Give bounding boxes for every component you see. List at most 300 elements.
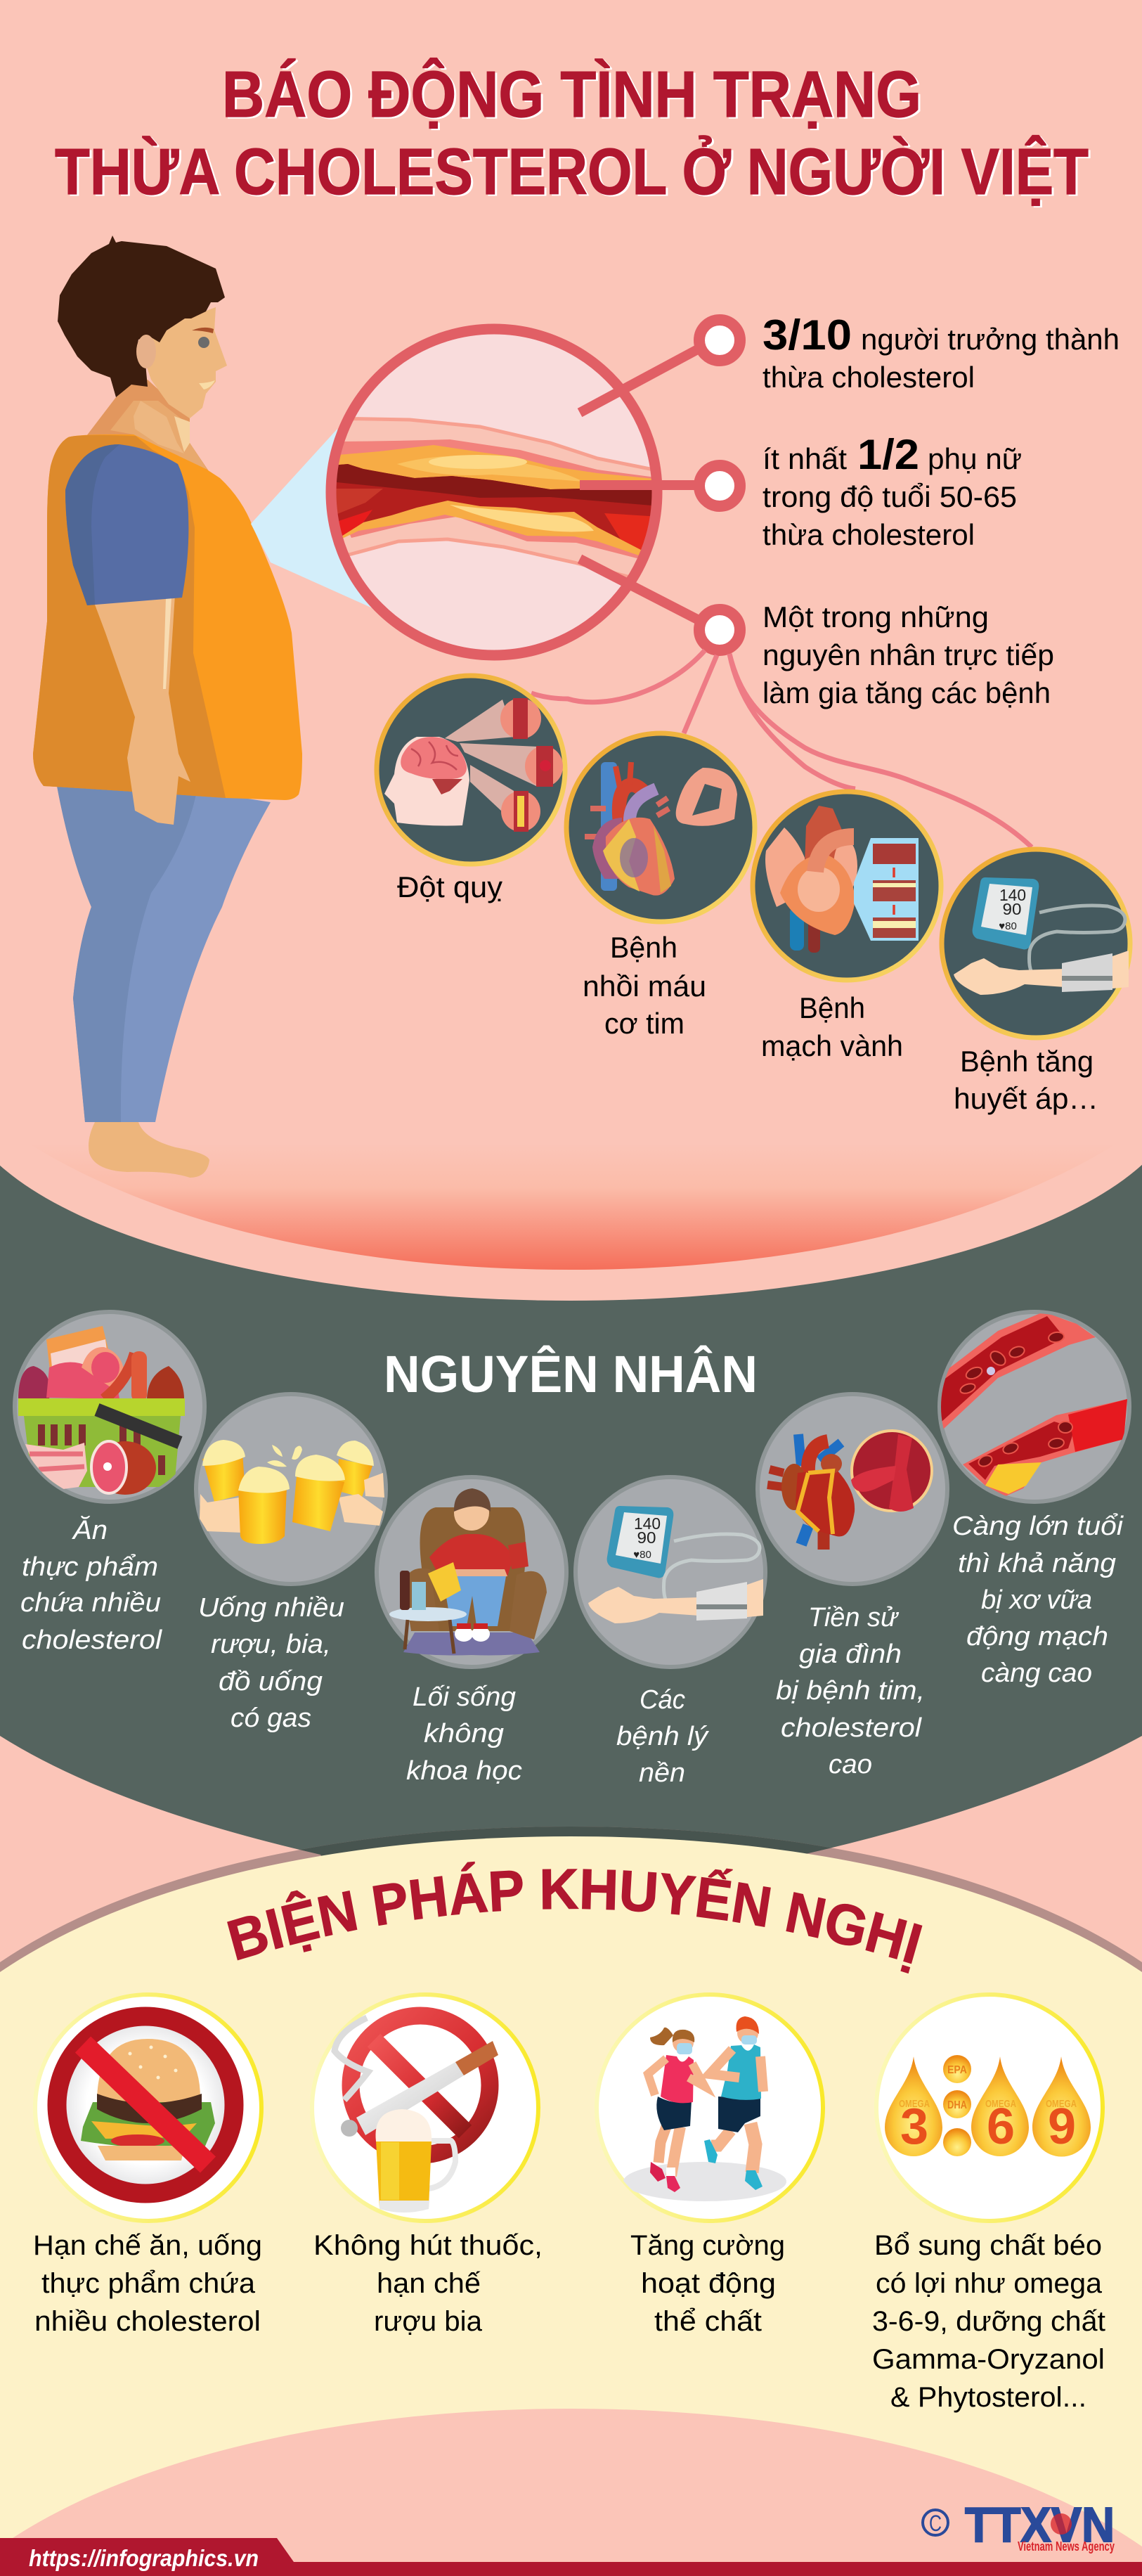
caption cause 6: [952, 1512, 1124, 1688]
caption recommendation 1: thực phẩm chứa: [41, 2268, 256, 2299]
section: [852, 1431, 932, 1511]
heart: [606, 818, 675, 896]
caption recommendation 3: thể chất: [654, 2306, 762, 2337]
stat text 2: 1/2: [857, 431, 919, 478]
caption recommendation 2: [313, 2230, 543, 2337]
caption recommendation 1: Hạn chế ăn, uống: [33, 2230, 262, 2261]
connectors to diseases: [531, 650, 1032, 847]
heart purple side: [592, 818, 622, 879]
caption cause 4: nền: [639, 1758, 685, 1788]
artery magnifier circle: [330, 329, 661, 655]
plaque: [985, 1462, 1042, 1494]
upper cells: [959, 1331, 1065, 1395]
lower vessel lumen: [968, 1422, 1072, 1480]
cone bottom: [470, 765, 523, 831]
heart light: [798, 867, 840, 912]
caption cause 5: bị bệnh tim,: [776, 1676, 925, 1706]
lower cells: [977, 1422, 1072, 1469]
globe: [1051, 2513, 1072, 2535]
head silhouette: [384, 737, 469, 825]
infarct: [620, 838, 648, 877]
drop labels: EPA: [947, 2064, 967, 2076]
cause 2: beers: [196, 1394, 386, 1584]
heading: recommendations arc path: [201, 1909, 948, 1970]
arm: [95, 595, 190, 825]
caption recommendation 4: Gamma-Oryzanol: [872, 2344, 1105, 2375]
caption cause 2: đồ uống: [219, 1667, 323, 1696]
table legs: [405, 1620, 454, 1654]
floor glow under the figure: [28, 1143, 1117, 1270]
arm end: [747, 1579, 763, 1617]
shirt: [429, 1534, 514, 1576]
top background block: [0, 0, 1142, 1097]
icon: stroke: [377, 676, 565, 864]
caption cause 4: [616, 1685, 709, 1788]
drop labels: 3: [900, 2099, 928, 2155]
pulmonary artery: [815, 837, 854, 872]
tube: [663, 1534, 760, 1609]
foam back right: [337, 1441, 374, 1466]
belly: [439, 1569, 507, 1579]
arm highlight: [163, 598, 171, 689]
cream panel shadow on dark: [0, 1736, 1142, 1898]
lower vessel outer: [963, 1399, 1127, 1496]
hair: [454, 1488, 491, 1512]
lumen: [336, 464, 651, 550]
heading: causes: NGUYÊN NHÂN: [384, 1345, 758, 1403]
vessel top: [500, 698, 541, 739]
shirt shadow side: [33, 435, 226, 798]
slice lumen: [692, 784, 722, 816]
neck back: [86, 380, 209, 471]
foot: [89, 1122, 209, 1178]
cause 1: meat basket: [15, 1312, 205, 1502]
connector lines: [580, 347, 703, 622]
upper vessel lumen: [938, 1316, 1065, 1422]
stat text 2: ít nhất: [763, 442, 847, 475]
stat text 3: [763, 600, 1054, 709]
jeans: [443, 1576, 506, 1626]
woman back leg: [658, 2127, 666, 2163]
face: [145, 307, 227, 418]
bacon stripes: [30, 1454, 84, 1469]
woman shorts: [656, 2097, 692, 2130]
patty: [97, 2094, 202, 2123]
man back leg: [711, 2130, 731, 2146]
foam back left: [202, 1440, 245, 1466]
plaque stage 1: [873, 844, 916, 864]
caption cause 2: [198, 1593, 344, 1733]
fat on heart: [603, 819, 640, 891]
stat text 1: thừa cholesterol: [763, 361, 975, 394]
splash: [267, 1445, 302, 1467]
vessel bottom: [501, 791, 540, 832]
smoked ham: [147, 1366, 184, 1399]
cuff tube: [1029, 906, 1125, 981]
snacks: [412, 1582, 426, 1610]
caption recommendation 3: [630, 2230, 785, 2337]
upper plaque core: [429, 455, 527, 469]
chips bag: [428, 1562, 461, 1602]
brain: [401, 737, 467, 779]
cigarette filter: [455, 2041, 498, 2075]
caption recommendation 3: hoạt động: [641, 2268, 776, 2299]
screen: [616, 1512, 667, 1564]
mug front left: [238, 1487, 287, 1544]
caption: coronary disease: [761, 991, 903, 1062]
woman front shoe: [666, 2176, 680, 2192]
beer light: [381, 2142, 399, 2200]
neck mid: [110, 401, 207, 470]
plaque panel: [854, 838, 919, 941]
marker: stat 1: [699, 320, 740, 361]
pulmonary: [630, 789, 656, 823]
woman face: [673, 2032, 694, 2053]
beer handle: [429, 2141, 455, 2189]
shoe tops: [457, 1623, 471, 1629]
upper plaque: [339, 445, 651, 489]
upper artery wall: [344, 417, 651, 477]
caption cause 6: thì khả năng: [958, 1549, 1116, 1578]
slash: [83, 2044, 208, 2165]
panel: causes background: [0, 1083, 1142, 1898]
basket holes: [38, 1424, 45, 1445]
stat text 3: nguyên nhân trực tiếp: [763, 638, 1054, 671]
foam front right: [295, 1455, 345, 1481]
reading: 140: [634, 1514, 661, 1533]
upper vessel rim: [938, 1312, 1096, 1434]
stat text 2: trong độ tuổi 50-65: [763, 480, 1017, 513]
woman top: [661, 2055, 694, 2103]
reading: [999, 886, 1026, 932]
aorta: [808, 1441, 828, 1473]
lettuce: [81, 2102, 215, 2150]
auricle: [821, 1454, 842, 1474]
caption: hypertension: [954, 1045, 1098, 1115]
caption cause 3: Lối sống: [413, 1682, 516, 1712]
caption cause 1: chứa nhiều: [20, 1588, 161, 1618]
man front shoe: [745, 2170, 763, 2190]
blue vessel bottom: [801, 1526, 808, 1545]
caption cause 5: cholesterol: [781, 1713, 923, 1743]
caption recommendation 1: nhiều cholesterol: [34, 2306, 261, 2337]
reading: 140: [999, 886, 1026, 904]
caption: myocardial infarction: [583, 931, 706, 1040]
drop labels: [899, 2064, 1077, 2155]
caption recommendation 4: 3-6-9, dưỡng chất: [872, 2306, 1105, 2337]
ash: [341, 2120, 358, 2137]
cause 3: sedentary lifestyle: [377, 1477, 566, 1667]
shoes: [455, 1626, 473, 1642]
marker: stat 3: [699, 610, 740, 650]
upper wall dark layer: [341, 439, 651, 479]
atrium: [781, 1464, 807, 1510]
caption recommendation 4: có lợi như omega: [876, 2268, 1103, 2299]
marker: stat 2: [699, 465, 740, 506]
slice: [676, 768, 737, 826]
man mask: [741, 2035, 757, 2044]
neck highlight: [174, 416, 190, 452]
section vessel vertical: [889, 1434, 914, 1512]
side vessels: [585, 798, 669, 837]
aorta: [619, 785, 643, 823]
right lobe: [833, 839, 857, 893]
caption cause 3: không: [424, 1719, 504, 1749]
lips: [199, 380, 215, 389]
caption cause 1: cholesterol: [22, 1625, 163, 1655]
stat text 2: thừa cholesterol: [763, 518, 975, 551]
bun bottom: [98, 2146, 185, 2160]
ham: [94, 1441, 156, 1495]
red vessel bottom: [818, 1529, 829, 1550]
recommendation 1: limit food: [35, 1995, 261, 2221]
salami: [18, 1366, 50, 1399]
footer url: https://infographics.vn: [29, 2545, 259, 2571]
caption recommendation 4: [872, 2230, 1105, 2413]
blank capsule: [943, 2128, 971, 2156]
man back shoe: [704, 2139, 718, 2163]
caption cause 6: động mạch: [966, 1622, 1108, 1651]
lumen left tint: [336, 489, 382, 513]
plaque stage 3: [873, 917, 916, 938]
basket rim: [18, 1398, 185, 1416]
bun top: [97, 2039, 200, 2108]
caption cause 2: có gas: [231, 1704, 311, 1733]
bottom pink arc: [0, 2409, 1142, 2576]
blue vessels top: [798, 1434, 841, 1466]
magnifier cone: [251, 429, 372, 608]
screen: [981, 884, 1032, 935]
lumen dark band: [330, 464, 661, 506]
cause 5: family heart history: [758, 1394, 947, 1584]
lower wall dark layer: [350, 515, 638, 558]
stat text 2: phụ nữ: [928, 442, 1022, 475]
eyebrow: [192, 328, 214, 333]
title: BÁO ĐỘNG TÌNH TRẠNG: [222, 58, 921, 131]
hand right back: [364, 1473, 384, 1498]
reading: 90: [637, 1528, 656, 1547]
armchair back: [420, 1507, 526, 1631]
caption cause 4: bệnh lý: [616, 1722, 709, 1751]
section vessel branch: [851, 1466, 896, 1492]
drop labels: 6: [987, 2099, 1015, 2155]
heart: [780, 854, 855, 935]
recommendation 2: no smoking, limit alcohol: [312, 1995, 538, 2221]
illustration: overweight man: [33, 236, 302, 1178]
forearm end: [1112, 951, 1129, 988]
icon: myocardial infarction: [566, 733, 755, 922]
caption: myocardial infarction: nhồi máu: [583, 970, 706, 1003]
caption cause 6: bị xơ vữa: [981, 1585, 1092, 1615]
cone top: [445, 700, 515, 742]
woman arms: [648, 2059, 705, 2095]
sleeve: [65, 444, 188, 605]
mug front right: [292, 1476, 344, 1531]
stat text 1: người trưởng thành: [861, 323, 1120, 356]
cuff: [1062, 953, 1112, 992]
panel: top pink section: [0, 879, 1142, 1301]
drop omega 9: [1032, 2056, 1091, 2156]
ventricle: [796, 1469, 855, 1537]
red chips: [508, 1542, 528, 1569]
lower artery wall: [343, 517, 637, 578]
slash: [374, 2040, 465, 2132]
drop labels: OMEGA: [899, 2098, 930, 2110]
white cell: [987, 1367, 995, 1375]
caption cause 5: gia đình: [799, 1640, 902, 1669]
sausage: [104, 1353, 135, 1399]
hand left: [200, 1494, 242, 1533]
smoke: [335, 2018, 368, 2100]
cerebellum: [432, 779, 462, 794]
monitor: [607, 1506, 673, 1578]
table: [389, 1607, 467, 1621]
sesame: [128, 2046, 177, 2080]
prohibition ring: [57, 2016, 234, 2194]
aorta: [805, 806, 843, 872]
cigarette body: [356, 2062, 464, 2135]
trousers: [57, 786, 271, 1122]
cheese: [91, 2121, 197, 2139]
caption cause 5: cao: [829, 1750, 872, 1779]
icon: hypertension: [942, 849, 1130, 1038]
caption recommendation 3: Tăng cường: [630, 2230, 785, 2261]
mug back right: [336, 1459, 372, 1498]
shirt: [33, 434, 302, 800]
drop labels: DHA: [947, 2099, 967, 2111]
caption cause 6: Càng lớn tuổi: [952, 1512, 1124, 1541]
caption: hypertension: Bệnh tăng: [960, 1045, 1094, 1078]
drop labels: 9: [1048, 2099, 1076, 2155]
man top: [721, 2044, 761, 2100]
caption recommendation 2: rượu bia: [374, 2306, 483, 2337]
recommendation 4: omega drops: [876, 1995, 1103, 2221]
ground: [623, 2162, 786, 2201]
reading: [633, 1514, 661, 1561]
caption: myocardial infarction: Bệnh: [610, 931, 677, 964]
caption: hypertension: huyết áp…: [954, 1082, 1098, 1115]
stat text 3: Một trong những: [763, 600, 989, 633]
panel: recommendations background: [0, 1836, 1142, 2576]
caption cause 3: [406, 1682, 522, 1786]
reading: ♥80: [633, 1549, 651, 1561]
cream panel shadow on pink: [0, 1827, 1142, 2039]
basket body: [24, 1416, 181, 1487]
caption recommendation 2: Không hút thuốc,: [313, 2230, 543, 2261]
tomato: [111, 2134, 164, 2147]
woman back shoe: [650, 2162, 666, 2182]
foam: [375, 2109, 432, 2142]
heading text on arc: BIỆN PHÁP KHUYẾN NGHỊ: [227, 1862, 922, 1974]
drop labels: OMEGA: [1046, 2098, 1077, 2110]
caption cause 1: Ăn: [72, 1515, 108, 1545]
man shorts: [718, 2097, 760, 2132]
trouser shadow: [57, 786, 197, 1122]
title: [55, 58, 1089, 208]
man hair: [737, 2016, 759, 2034]
reading: ♥80: [999, 920, 1017, 932]
upper plaque mid: [397, 456, 583, 482]
drop omega 3: [885, 2056, 942, 2156]
neck light: [134, 401, 184, 453]
stat text 1: [763, 311, 1120, 394]
caption cause 3: khoa học: [406, 1756, 522, 1786]
plaque stage 2: [873, 880, 916, 901]
caption cause 2: rượu, bia,: [211, 1630, 331, 1659]
woman mask: [677, 2043, 692, 2054]
beer glass: [376, 2141, 432, 2212]
mug back left: [202, 1452, 245, 1502]
reading: 90: [1002, 900, 1022, 918]
hand and arm: [954, 958, 1065, 995]
vessel middle: [525, 746, 563, 787]
cause 4: underlying disease: [576, 1477, 765, 1667]
aorta branches: [616, 762, 631, 787]
fat lines: [798, 1471, 833, 1534]
prohibition ring: [351, 2016, 490, 2155]
woman hair: [650, 2028, 694, 2045]
head: [454, 1495, 489, 1531]
DHA capsule: [943, 2090, 971, 2118]
drop labels: OMEGA: [985, 2098, 1016, 2110]
caption recommendation 4: Bổ sung chất béo: [874, 2230, 1102, 2261]
woman front sock: [666, 2168, 675, 2177]
caption recommendation 4: & Phytosterol...: [890, 2382, 1086, 2413]
glass base: [379, 2201, 429, 2213]
foam front left: [238, 1467, 290, 1493]
caption cause 5: Tiền sử: [808, 1603, 900, 1632]
icon: coronary disease: [753, 792, 941, 980]
stat text 3: làm gia tăng các bệnh: [763, 676, 1051, 709]
man arms: [710, 2049, 763, 2092]
caption cause 4: Các: [640, 1685, 685, 1715]
eye: [198, 337, 209, 348]
round cut: [82, 1347, 124, 1389]
caption recommendation 2: hạn chế: [377, 2268, 481, 2299]
fat right: [654, 826, 671, 893]
cone middle: [460, 743, 538, 787]
lungs: [765, 827, 805, 907]
meat: [46, 1363, 119, 1399]
copyright sign: [923, 2510, 948, 2535]
rug: [403, 1632, 540, 1655]
caption: stroke: Đột quỵ: [397, 870, 502, 903]
caption recommendation 1: [33, 2230, 262, 2337]
bottle: [400, 1571, 410, 1610]
footer band: [0, 2538, 1142, 2576]
caption cause 6: càng cao: [981, 1659, 1092, 1688]
sleeve shadow: [65, 444, 119, 605]
blue vessel: [601, 762, 617, 891]
lower plaque core: [450, 505, 594, 532]
brain folds: [411, 742, 458, 770]
arrows: [893, 868, 895, 915]
side stubs: [767, 1469, 784, 1487]
handle: [97, 1410, 180, 1443]
stat text 2: [763, 431, 1022, 551]
monitor: [973, 877, 1039, 949]
wordmark: TTXVN: [965, 2497, 1115, 2552]
caption: coronary disease: Bệnh: [799, 991, 865, 1024]
caption cause 1: thực phẩm: [22, 1552, 158, 1582]
logo: C: [929, 2511, 942, 2536]
EPA capsule: [943, 2055, 971, 2083]
hair: [58, 236, 225, 397]
drop omega 6: [971, 2056, 1029, 2156]
hand right: [339, 1494, 383, 1526]
hand: [588, 1587, 699, 1623]
cuff: [696, 1582, 747, 1621]
